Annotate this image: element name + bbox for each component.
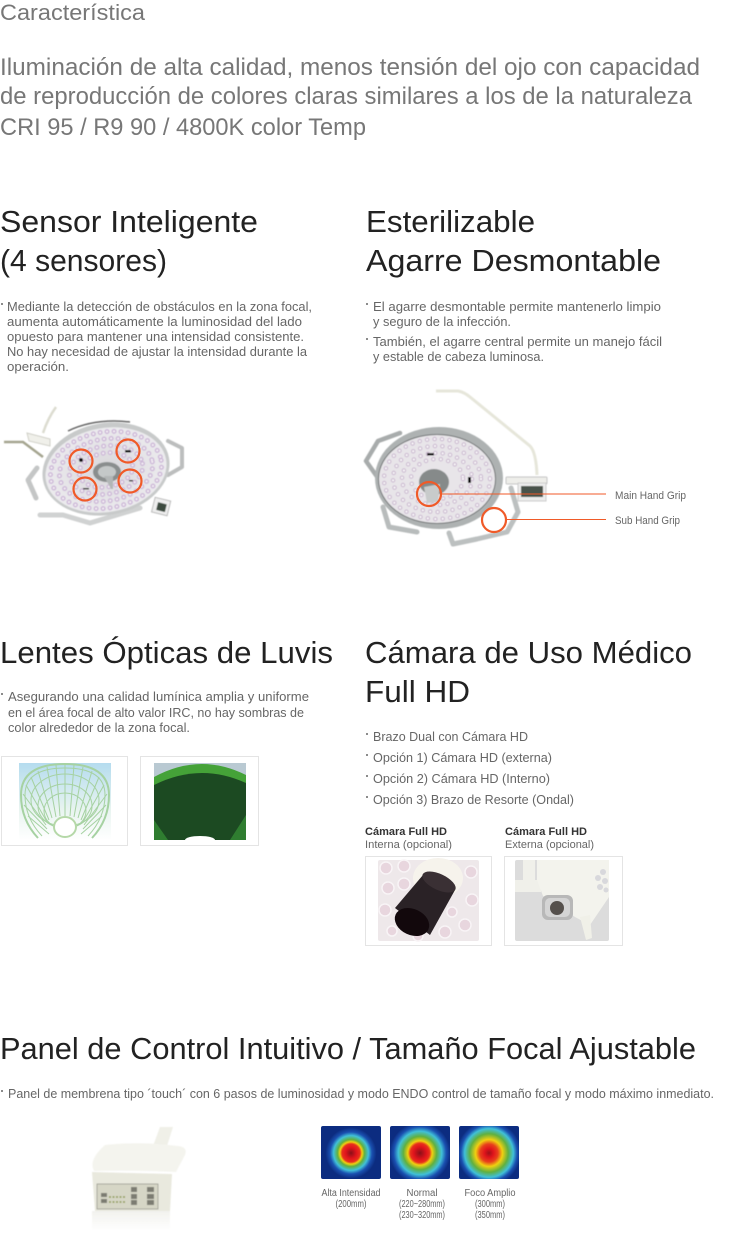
intro text block — [0, 54, 700, 141]
text block: sensor description: operación. — [7, 359, 69, 374]
callout: Main Hand Grip — [417, 482, 686, 506]
text block: sensor description: No hay necesidad de ajustar la intensidad durante la — [7, 344, 308, 359]
text block: panel description: Panel de membrena tipo ´touch´ con 6 pasos de luminosidad y modo ENDO control de tamaño focal y modo máximo inmediato. — [8, 1086, 714, 1101]
chart: light spot Foco Amplio — [459, 1126, 519, 1221]
image: lens dark green — [140, 756, 258, 846]
text block: lens description: en el área focal de alto valor IRC, no hay sombras de — [8, 705, 304, 720]
caption: internal camera: Cámara Full HD — [365, 826, 447, 838]
intro text block: CRI 95 / R9 90 / 4800K color Temp — [0, 114, 366, 141]
illustration: surgical lamp with 4 sensors — [4, 407, 182, 525]
chart: light spot Foco Amplio: (300mm) — [475, 1199, 505, 1210]
text block: grip description: También, el agarre central permite un manejo fácil — [373, 334, 662, 349]
list: camera options: Opción 2) Cámara HD (Interno) — [373, 771, 550, 786]
heading: Esterilizable Agarre Desmontable — [366, 204, 661, 278]
image: lens wireframe — [2, 756, 128, 846]
panel: Panel de Control Intuitivo — [0, 1031, 714, 1231]
text block: lens description: Asegurando una calidad lumínica amplia y uniforme — [8, 689, 309, 704]
panel: Esterilizable Agarre Desmontable — [366, 204, 686, 544]
chart: light spot Foco Amplio: (350mm) — [475, 1210, 505, 1221]
caption: external camera — [505, 826, 594, 851]
heading: Esterilizable Agarre Desmontable: Agarre Desmontable — [366, 243, 661, 278]
heading: Panel de Control Intuitivo / Tamaño Focal Ajustable: Panel de Control Intuitivo / Tamaño Focal Ajustable — [0, 1031, 696, 1066]
image: control panel device — [92, 1127, 186, 1231]
text block: sensor description — [1, 299, 312, 374]
list: camera options: Opción 1) Cámara HD (externa) — [373, 750, 552, 765]
list: camera options: Opción 3) Brazo de Resorte (Ondal) — [373, 792, 574, 807]
heading: Sensor Inteligente: Sensor Inteligente — [0, 204, 258, 239]
chart: light spot Normal: (220~280mm) — [399, 1199, 445, 1210]
callout: Sub Hand Grip — [482, 508, 680, 532]
text block: sensor description: aumenta automáticamente la luminosidad del lado — [7, 314, 302, 329]
text block: grip description: y estable de cabeza luminosa. — [373, 349, 544, 364]
intro text block: Iluminación de alta calidad, menos tensión del ojo con capacidad — [0, 54, 700, 81]
heading: Cámara de Uso Médico Full HD — [365, 635, 692, 709]
chart: light spot Alta Intensidad — [321, 1126, 381, 1210]
image: internal camera — [366, 856, 492, 946]
chart: light spot Foco Amplio: Foco Amplio — [464, 1188, 516, 1199]
sensor markers: orange circles — [70, 440, 142, 500]
text block: sensor description: opuesto para mantener una intensidad consistente. — [7, 329, 304, 344]
chart: light spot Normal: Normal — [406, 1188, 438, 1199]
heading: Cámara de Uso Médico Full HD: Cámara de Uso Médico — [365, 635, 692, 670]
image: external camera — [504, 856, 622, 946]
text block: sensor description: Mediante la detección de obstáculos en la zona focal, — [7, 299, 312, 314]
panel: Cámara de Uso Médico Full HD — [365, 635, 692, 946]
callout: Sub Hand Grip: Sub Hand Grip — [615, 515, 680, 527]
caption: internal camera: Interna (opcional) — [365, 839, 452, 851]
label: Característica: Característica — [0, 0, 146, 25]
heading: Sensor Inteligente: (4 sensores) — [0, 243, 167, 278]
heading: Cámara de Uso Médico Full HD: Full HD — [365, 674, 470, 709]
heading: Lentes Ópticas de Luvis: Lentes Ópticas de Luvis — [0, 635, 333, 670]
heading: Esterilizable Agarre Desmontable: Esterilizable — [366, 204, 535, 239]
text block: grip description — [366, 299, 662, 364]
callout: Main Hand Grip: Main Hand Grip — [615, 490, 686, 502]
panel: Lentes Ópticas de Luvis — [0, 635, 333, 846]
text block: lens description — [1, 689, 309, 735]
list: camera options — [366, 729, 574, 807]
section: Característica intro — [0, 0, 700, 141]
list: camera options: Brazo Dual con Cámara HD — [373, 729, 528, 744]
chart: light spot Alta Intensidad: (200mm) — [336, 1199, 366, 1210]
text block: grip description: El agarre desmontable permite mantenerlo limpio — [373, 299, 661, 314]
caption: external camera: Externa (opcional) — [505, 839, 594, 851]
caption: internal camera — [365, 826, 452, 851]
text block: grip description: y seguro de la infección. — [373, 314, 511, 329]
text block: lens description: color alrededor de la zona focal. — [8, 720, 190, 735]
caption: external camera: Cámara Full HD — [505, 826, 587, 838]
panel: Sensor Inteligente — [0, 204, 312, 525]
chart: light spot Alta Intensidad: Alta Intensidad — [322, 1188, 380, 1199]
illustration: surgical lamp with hand grips — [366, 391, 547, 544]
intro text block: de reproducción de colores claras similares a los de la naturaleza — [0, 83, 693, 110]
chart: light spot Normal — [390, 1126, 450, 1221]
heading: Sensor Inteligente — [0, 204, 258, 278]
chart: light spot Normal: (230~320mm) — [399, 1210, 445, 1221]
